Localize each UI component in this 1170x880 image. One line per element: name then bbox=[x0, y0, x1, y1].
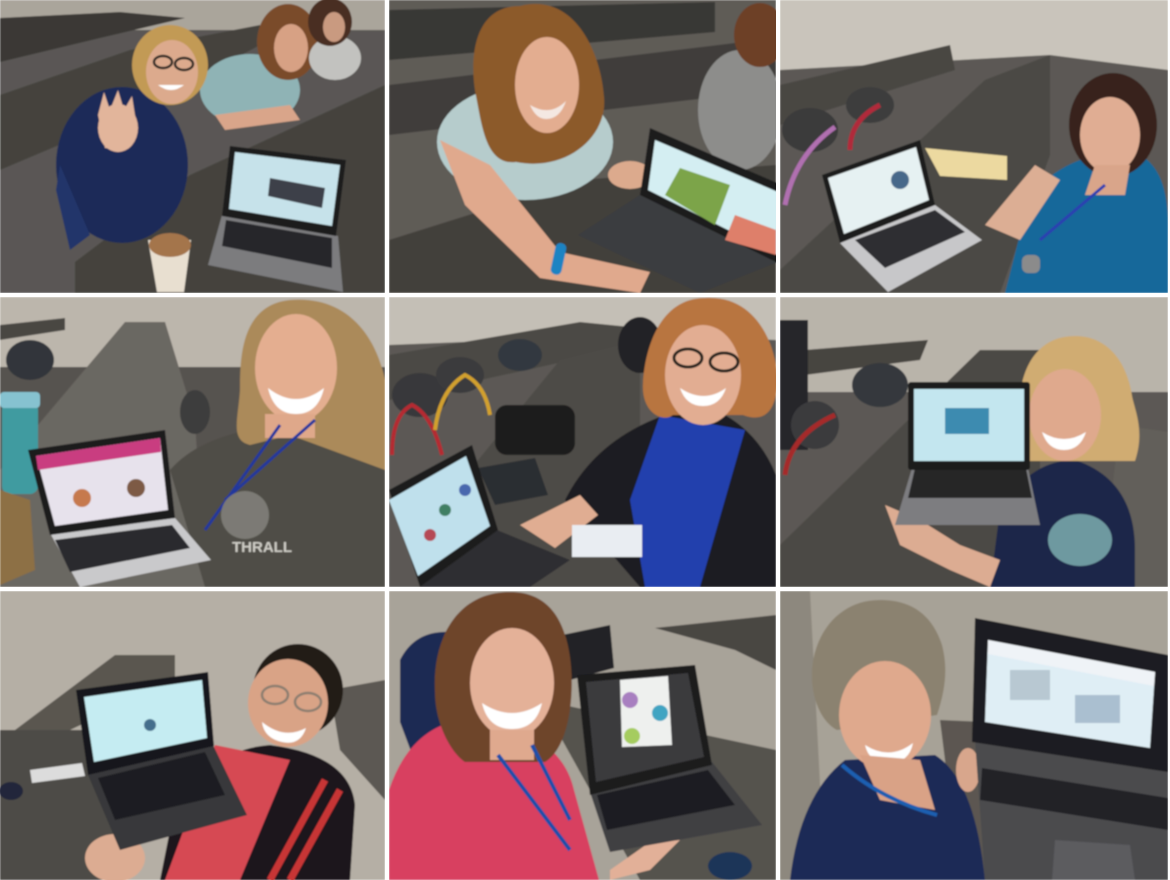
background woman in grey bbox=[698, 3, 786, 170]
laptop bbox=[640, 128, 776, 264]
laptop bbox=[895, 382, 1040, 525]
laptop bbox=[28, 430, 211, 587]
chairs bbox=[782, 87, 894, 205]
woman in teal floral top bbox=[200, 4, 319, 130]
background person and chairs bbox=[780, 320, 908, 475]
photo 8: brown-haired woman in pink shirt with a laptop bbox=[389, 591, 776, 880]
black handbag bbox=[495, 405, 575, 455]
photo 7: woman with glasses in black jacket holding a laptop bbox=[0, 591, 385, 880]
woman bbox=[85, 644, 355, 880]
laptop bbox=[577, 665, 762, 852]
woman bbox=[985, 73, 1168, 293]
water bottle bbox=[0, 392, 40, 494]
shirt logo text: THRALL bbox=[232, 539, 292, 556]
laptop bbox=[822, 140, 982, 292]
woman bbox=[437, 4, 652, 293]
woman bbox=[885, 336, 1139, 587]
photo 1: three teachers at desks, woman waving bbox=[0, 0, 385, 293]
woman in background bbox=[308, 0, 361, 80]
laptop bbox=[208, 146, 346, 292]
paper cup bbox=[148, 233, 191, 292]
photo 2: curly-haired woman in teal floral top bbox=[389, 0, 786, 293]
photo 3: woman in blue shirt with silver laptop bbox=[780, 0, 1168, 293]
handbag bbox=[0, 490, 35, 585]
laptop bbox=[389, 445, 570, 587]
photo 4: blonde woman in grey Thrall t-shirt bbox=[0, 297, 385, 587]
woman bbox=[389, 592, 680, 880]
photo 5: red-haired woman in blue shirt and black cardigan bbox=[389, 297, 777, 587]
woman bbox=[170, 300, 385, 587]
woman bbox=[790, 600, 985, 880]
tablet bbox=[478, 458, 548, 505]
background person bbox=[618, 317, 662, 373]
chairs bbox=[6, 340, 210, 434]
waving woman in navy floral top bbox=[56, 25, 208, 250]
laptop bbox=[972, 618, 1168, 880]
computer mouse bbox=[708, 852, 752, 880]
person in navy behind bbox=[399, 631, 446, 750]
photo 6: blonde woman holding a laptop bbox=[780, 297, 1168, 587]
woman bbox=[520, 298, 777, 587]
yellow notepad bbox=[925, 148, 1007, 180]
phone and mouse bbox=[0, 763, 85, 800]
photo 9: grey-haired woman in navy shirt with a large laptop bbox=[780, 591, 1168, 880]
chairs bbox=[392, 339, 542, 455]
back laptop bbox=[562, 625, 614, 680]
laptop bbox=[76, 672, 247, 850]
